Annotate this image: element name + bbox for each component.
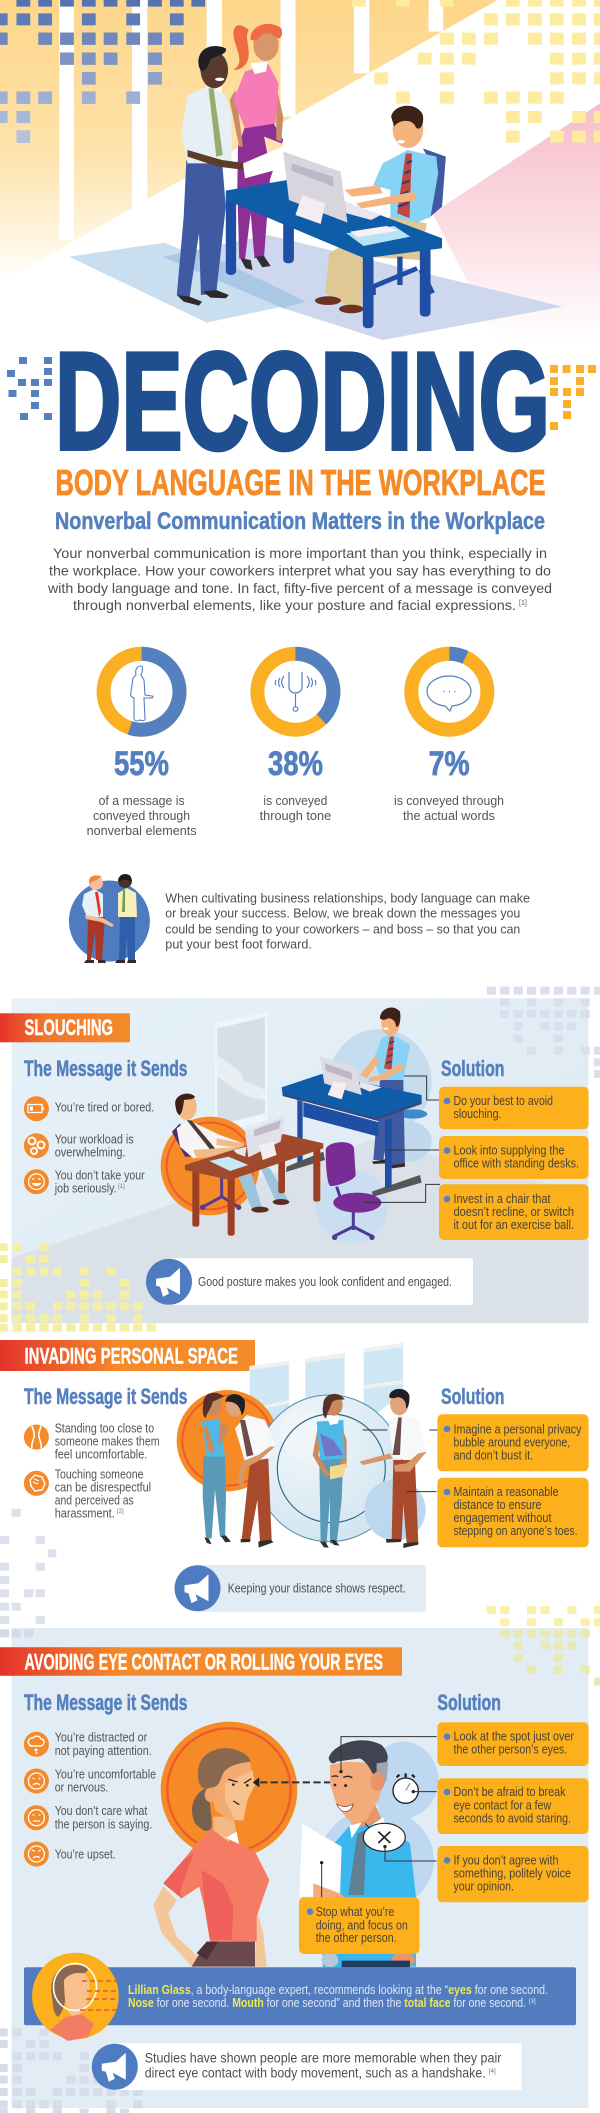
stat: 55%: 55% (114, 745, 169, 783)
solution box: privacy bubble: Imagine a personal privacy (454, 1422, 582, 1436)
illustration: personal space bubble (177, 1343, 437, 1548)
icon: gears (24, 1133, 49, 1158)
intro to sections text (165, 891, 530, 951)
stat: 38%: through tone (260, 809, 331, 823)
solution box: voice opinion: your opinion. (454, 1880, 514, 1894)
callout: studies on eye contact: [4] (489, 2069, 496, 2075)
stat: 7%: is conveyed through (394, 794, 504, 808)
solution box: look over eyes: the other person’s eyes. (454, 1743, 567, 1757)
message: standing too close: feel uncomfortable. (55, 1447, 147, 1461)
section header: personal space: INVADING PERSONAL SPACE (24, 1343, 238, 1368)
panel: invading personal space (0, 1340, 600, 1622)
lavender squares top left (0, 1621, 33, 1645)
stat: 55% (87, 654, 197, 838)
intro paragraph (47, 545, 552, 613)
seated man in blue shirt (315, 106, 446, 313)
callout: studies on eye contact (92, 2043, 522, 2090)
panel: avoiding eye contact (0, 1628, 600, 2113)
donut chart 55% (104, 654, 180, 730)
message: not serious: [1] (118, 1184, 125, 1190)
stat: 55%: of a message is (99, 794, 185, 808)
message: standing too close: Standing too close to (55, 1421, 154, 1435)
icon: angry face (24, 1842, 49, 1866)
icon: person outline (131, 666, 153, 721)
solution box: look over eyes: Look at the spot just over (454, 1730, 574, 1744)
intro paragraph: with body language and tone. In fact, fifty-five percent of a message is conveyed (47, 580, 552, 596)
message: workload (24, 1132, 134, 1160)
section header: slouching: SLOUCHING (24, 1015, 113, 1040)
quote band: Lillian Glass: [3] (529, 1999, 536, 2005)
blue squares (0, 1, 205, 137)
illustration: slouching vs standing desk (161, 1007, 440, 1243)
intro to sections text: put your best foot forward. (165, 936, 312, 951)
background circles (161, 1029, 432, 1243)
stat: 38%: 38% (268, 745, 323, 783)
solution box: break eye contact (437, 1778, 589, 1834)
floor (12, 1140, 588, 1323)
center woman (313, 1394, 347, 1548)
icon: two figures (24, 1424, 49, 1450)
illustration: eye contact between two people (153, 1722, 438, 1967)
icon: megaphone (146, 1259, 192, 1305)
message: standing too close: someone makes them (55, 1434, 160, 1448)
solution box: chair (439, 1184, 589, 1240)
orange circle (161, 1722, 297, 1858)
section header: eye contact (0, 1647, 402, 1676)
woman being crowded (202, 1393, 231, 1544)
solution box: chair: doesn’t recline, or switch (454, 1205, 574, 1219)
message: don't care: the person is saying. (55, 1817, 152, 1831)
callout lines (364, 1076, 440, 1202)
stat: 38%: is conveyed (263, 794, 327, 808)
section header: personal space (0, 1340, 255, 1371)
purple office chair (326, 1142, 381, 1240)
icon: laughing face (24, 1169, 49, 1194)
stat: 7% (394, 654, 504, 823)
solution box: voice opinion: If you don’t agree with (454, 1853, 559, 1867)
message: standing too close (24, 1421, 160, 1461)
solution box: break eye contact: seconds to avoid staring. (454, 1811, 571, 1825)
man with green tie (115, 874, 137, 963)
right man (359, 1389, 427, 1548)
two colleagues icon (69, 874, 150, 963)
desk with computer (226, 152, 442, 328)
heading: solution: Solution (441, 1384, 504, 1409)
intro paragraph: [1] (519, 600, 527, 607)
window (215, 1012, 267, 1133)
man (299, 1740, 416, 1967)
heading: the message it sends: The Message it Sends (24, 1384, 188, 1409)
stat: 7%: 7% (429, 745, 470, 783)
windows (249, 1343, 403, 1437)
message: don't care (24, 1804, 152, 1831)
message: don't care: You don’t care what (55, 1804, 148, 1818)
solution box: privacy bubble: bubble around everyone, (454, 1435, 570, 1449)
message: workload: overwhelming. (55, 1146, 126, 1160)
solution box: look over eyes (437, 1722, 589, 1766)
callout: good posture: Good posture makes you look confident and engaged. (198, 1274, 452, 1289)
orange circle (177, 1390, 278, 1491)
yellow squares (352, 1, 600, 137)
icon: stopwatch (393, 1773, 418, 1803)
intro to sections text: could be sending to your coworkers – and boss – so that you can (165, 921, 520, 936)
solution box: voice opinion (437, 1846, 589, 1902)
icon: nervous face (24, 1768, 49, 1794)
woman (153, 1748, 269, 1967)
solution box: reasonable distance: Maintain a reasonable (454, 1485, 559, 1499)
message: touching someone: Touching someone (55, 1467, 144, 1481)
callout: good posture (146, 1258, 473, 1305)
section header: slouching (0, 1013, 130, 1042)
solution box: break eye contact: Don’t be afraid to break (454, 1785, 566, 1799)
icon: indifferent face (24, 1805, 49, 1830)
yellow squares top right (500, 1634, 600, 1682)
message: not serious: job seriously. (54, 1182, 117, 1196)
icon: low battery (24, 1096, 49, 1121)
lavender squares left (0, 1513, 56, 1620)
message: uncomfortable: or nervous. (55, 1781, 108, 1795)
stat: 55%: conveyed through (93, 809, 190, 823)
man leaning in (225, 1394, 276, 1548)
icon: hand (24, 1471, 49, 1496)
message: uncomfortable (24, 1767, 156, 1795)
icon: tuning fork (275, 672, 316, 711)
intro to sections text: or break your success. Below, we break down the messages you (165, 906, 520, 921)
message: tired or bored (24, 1096, 154, 1121)
message: workload: Your workload is (55, 1132, 134, 1146)
wooden desk (185, 1116, 323, 1236)
callout: studies on eye contact: Studies have shown people are more memorable when they pair (145, 2049, 502, 2065)
solution box: voice opinion: something, politely voice (454, 1867, 571, 1881)
message: distracted: not paying attention. (55, 1744, 152, 1758)
heading: the message it sends: The Message it Sends (24, 1056, 188, 1081)
solution box: reasonable distance: engagement without (454, 1511, 552, 1525)
solution box: reasonable distance (437, 1478, 589, 1547)
section header: eye contact: AVOIDING EYE CONTACT OR ROLLING YOUR EYES (24, 1649, 383, 1674)
donut chart 7% (411, 654, 487, 730)
message: not serious (24, 1168, 145, 1196)
title squares left (7, 357, 52, 420)
message: touching someone: and perceived as (55, 1493, 134, 1507)
intro paragraph: Your nonverbal communication is more important than you think, especially in (53, 545, 547, 561)
solution box: standing desks (439, 1136, 589, 1179)
message: upset (24, 1842, 116, 1866)
icon: speech bubble with X (363, 1823, 405, 1851)
icon: megaphone (92, 2044, 138, 2090)
message: distracted: You’re distracted or (55, 1731, 147, 1745)
callout: studies on eye contact: direct eye contact with body movement, such as a handshake. (145, 2065, 486, 2081)
message: tired or bored: You’re tired or bored. (55, 1101, 154, 1115)
intro paragraph: the workplace. How your coworkers interpret what you say has everything to do (49, 563, 551, 579)
solution box: avoid slouching: slouching. (454, 1107, 502, 1121)
solution box: standing desks: Look into supplying the (454, 1144, 565, 1158)
lavender squares bottom left (0, 2032, 142, 2113)
papers held by colleagues (243, 137, 285, 178)
callout lines (363, 1430, 437, 1492)
intro paragraph: through nonverbal elements, like your posture and facial expressions. (73, 597, 516, 613)
woman with red hair (230, 24, 283, 270)
solution box: avoid slouching (439, 1087, 589, 1129)
solution box: privacy bubble (437, 1414, 589, 1471)
message: upset: You’re upset. (55, 1847, 116, 1861)
standing desk (282, 1056, 422, 1197)
solution box: privacy bubble: and don’t bust it. (454, 1448, 533, 1462)
yellow squares (0, 1247, 156, 1328)
solution box: reasonable distance: stepping on anyone’s toes. (454, 1524, 578, 1538)
dashed eye-line arrow (253, 1777, 332, 1787)
man in white shirt with green tie (177, 46, 247, 306)
heading: the message it sends: The Message it Sends (24, 1690, 188, 1715)
solution box: standing desks: office with standing desks. (454, 1156, 579, 1170)
solution box: chair: Invest in a chair that (454, 1192, 551, 1206)
solution box: reasonable distance: distance to ensure (454, 1498, 542, 1512)
quote band: Lillian Glass (24, 1953, 576, 2041)
title squares right (550, 365, 596, 430)
solution box: chair: it out for an exercise ball. (454, 1218, 574, 1232)
message: touching someone: can be disrespectful (55, 1480, 151, 1494)
intro to sections text: When cultivating business relationships, body language can make (165, 891, 530, 906)
callout lines (320, 1737, 437, 1897)
heading: solution: Solution (437, 1690, 501, 1715)
message: touching someone: harassment. (55, 1506, 115, 1520)
message: touching someone: [2] (117, 1509, 124, 1515)
icon: thought cloud (24, 1732, 49, 1757)
hero illustration: coworkers around a desk (0, 0, 600, 340)
solution box: stop and focus (299, 1897, 420, 1954)
panel: slouching (0, 991, 600, 1328)
stat: 7%: the actual words (403, 809, 495, 823)
solution box: avoid slouching: Do your best to avoid (454, 1094, 553, 1108)
donut chart 38% (257, 654, 333, 730)
quote band: Lillian Glass: Lillian Glass, a body-language expert, recommends looking at the “eyes for one second. (128, 1983, 548, 1997)
blue circles (319, 1742, 438, 1912)
callout: keeping distance (174, 1565, 426, 1612)
message: distracted (24, 1731, 152, 1758)
yellow squares right (487, 1610, 600, 1622)
solution box: stop and focus: the other person. (316, 1931, 397, 1945)
hero background panels (0, 0, 600, 340)
icon: speech bubble (427, 676, 471, 711)
lavender squares (487, 991, 600, 1074)
message: not serious: You don’t take your (55, 1168, 145, 1182)
slouching man (172, 1093, 289, 1213)
solution box: stop and focus: Stop what you’re (316, 1905, 394, 1919)
stat: 38% (257, 654, 333, 823)
quote band: Lillian Glass: Nose for one second. Mouth for one second” and then the total face for one second. (128, 1996, 526, 2010)
stat: 55%: nonverbal elements (87, 824, 197, 838)
heading: solution: Solution (441, 1056, 504, 1081)
solution box: stop and focus: doing, and focus on (316, 1918, 408, 1932)
solution box: break eye contact: eye contact for a few (454, 1798, 552, 1812)
portrait: woman with face guide (32, 1953, 119, 2041)
privacy bubble (256, 1395, 426, 1542)
man with red tie (82, 875, 114, 963)
message: uncomfortable: You’re uncomfortable (55, 1767, 156, 1781)
floor shadows (69, 235, 563, 340)
message: touching someone (24, 1467, 151, 1520)
callout: keeping distance: Keeping your distance shows respect. (228, 1580, 406, 1595)
icon: megaphone (174, 1565, 220, 1611)
standing man (360, 1007, 410, 1168)
